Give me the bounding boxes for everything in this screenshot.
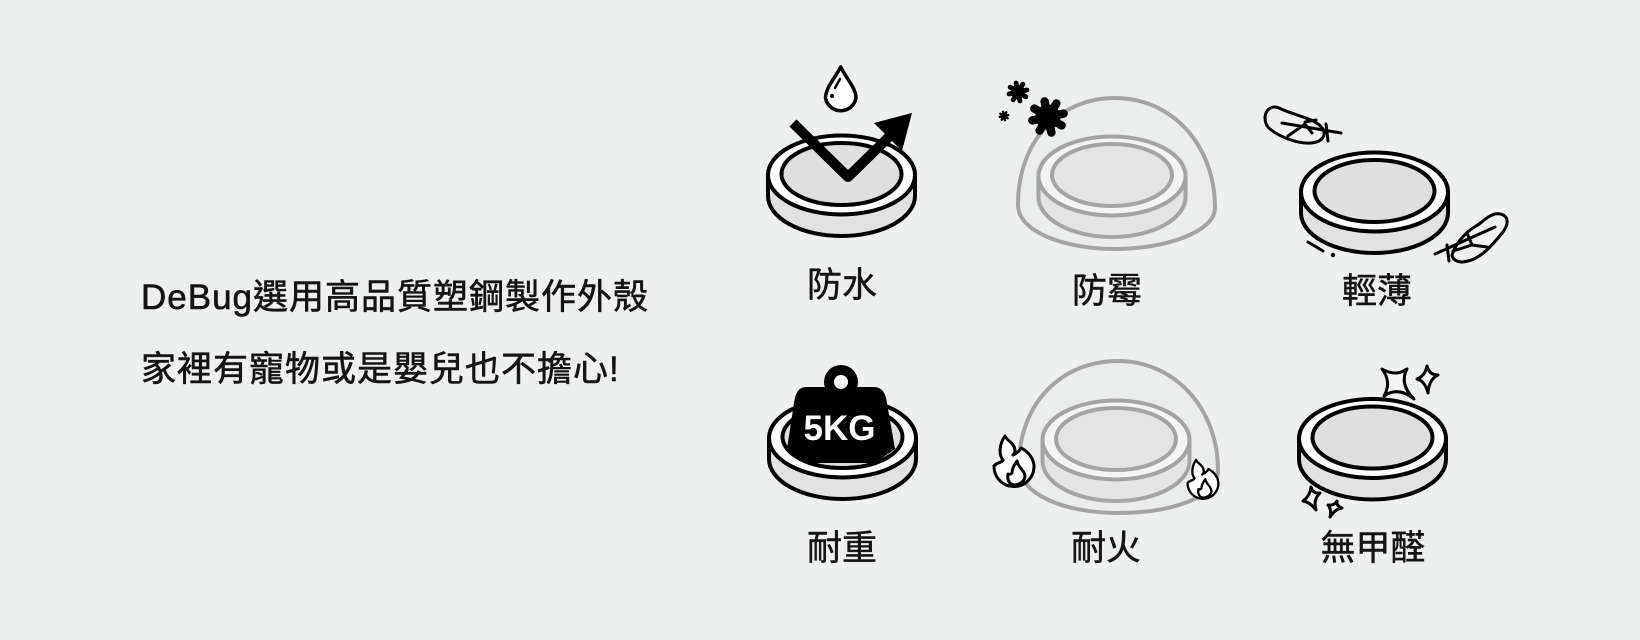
intro text: DeBug選用高品質塑鋼製作外殼 (141, 278, 649, 317)
dome (1019, 361, 1218, 513)
feature: fire resistant (994, 361, 1218, 568)
feature: lightweight (1265, 107, 1507, 311)
feature: mould proof (1000, 83, 1215, 311)
label: mould proof: 防霉 (1072, 272, 1142, 311)
icon: flame left (994, 436, 1034, 487)
icon: bounce arrow (793, 113, 912, 177)
icon: 5kg weight: 5KG (804, 409, 875, 448)
feature: load bearing (769, 365, 916, 568)
icon: flame right (1188, 460, 1218, 499)
icon: motion marks (1308, 242, 1335, 257)
dome (1018, 98, 1215, 249)
feature: formaldehyde free (1299, 366, 1446, 568)
icon: feather top (1265, 107, 1341, 143)
label: lightweight: 輕薄 (1342, 272, 1412, 311)
feature: waterproof (768, 67, 915, 305)
icon: water drop (826, 67, 856, 111)
icon: mould spots (1000, 83, 1064, 133)
intro text (141, 278, 649, 389)
label: fire resistant: 耐火 (1071, 529, 1141, 568)
icon: sparkles (1303, 366, 1438, 517)
label: formaldehyde free: 無甲醛 (1320, 529, 1426, 568)
intro text: 家裡有寵物或是嬰兒也不擔心! (141, 350, 620, 389)
label: waterproof: 防水 (807, 266, 877, 305)
icon: feather bottom (1435, 214, 1507, 262)
label: load bearing: 耐重 (807, 529, 877, 568)
icon: 5kg weight (787, 365, 895, 463)
